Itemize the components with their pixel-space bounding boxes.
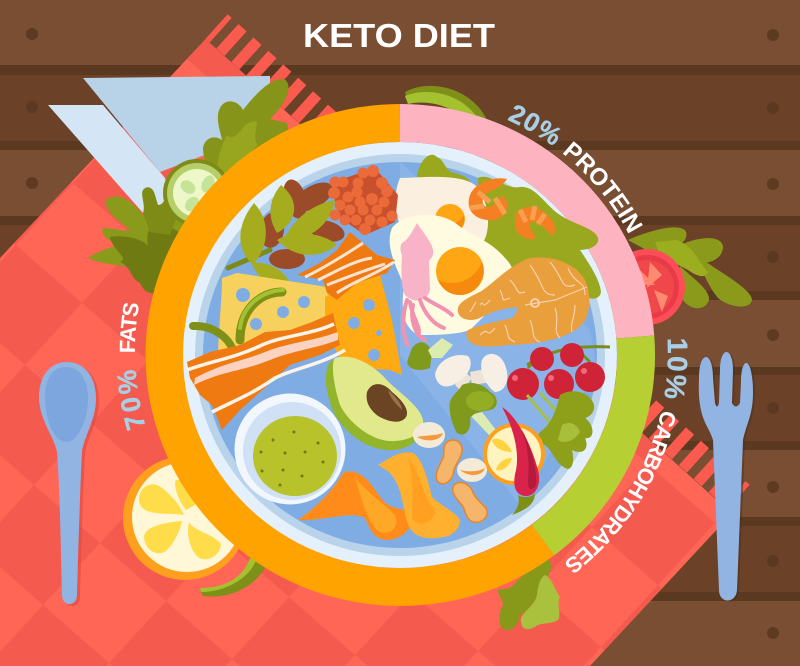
avocado half bbox=[326, 357, 423, 450]
label: 70% fats: FATS bbox=[120, 302, 138, 352]
olive green leaves and almonds bbox=[228, 176, 347, 285]
broccoli bbox=[449, 383, 497, 436]
label: 70% fats: 70% bbox=[117, 370, 145, 431]
icon: fork bbox=[699, 352, 755, 602]
yellow cheese bbox=[218, 273, 340, 360]
mushrooms bbox=[435, 354, 507, 392]
lemon slice beside plate bbox=[123, 456, 247, 580]
label: 20% protein: 20% bbox=[508, 105, 561, 145]
bowl of green sauce bbox=[234, 394, 346, 504]
plate bbox=[183, 142, 617, 568]
green pepper at top of plate bbox=[405, 86, 487, 124]
tomato and leaves at right of plate bbox=[609, 227, 752, 325]
fried egg front bbox=[390, 215, 514, 335]
label: 10% carbohydrates bbox=[566, 339, 688, 572]
label: 10% carbohydrates: 10% bbox=[664, 339, 688, 398]
shrimp 1 bbox=[469, 178, 507, 220]
chicken wing back bbox=[378, 452, 460, 538]
cucumber slice bbox=[163, 159, 231, 227]
orange cheese bbox=[325, 275, 402, 375]
shrimp 2 bbox=[515, 206, 555, 239]
squid bbox=[400, 223, 452, 345]
bacon large slice bbox=[187, 313, 345, 430]
red chili pepper bbox=[502, 407, 539, 515]
donut chart ring: 10% carbohydrates bbox=[543, 337, 636, 540]
green pepper under plate bbox=[200, 558, 266, 597]
bacon top slice bbox=[297, 232, 395, 300]
label: 10% carbohydrates: CARBOHYDRATES bbox=[566, 412, 675, 572]
left lettuce under napkin bbox=[88, 196, 195, 294]
label: 70% fats bbox=[117, 302, 145, 431]
small broccoli bbox=[407, 338, 453, 370]
lettuce under eggs bbox=[417, 155, 601, 299]
donut chart ring: 20% protein bbox=[400, 123, 635, 337]
parsley bbox=[527, 391, 594, 469]
salmon steak bbox=[458, 257, 589, 346]
icon: spoon bbox=[39, 362, 99, 606]
label: 20% protein bbox=[508, 105, 643, 234]
title: keto diet: KETO DIET bbox=[303, 17, 495, 54]
lemon slice on plate bbox=[483, 423, 545, 485]
green pepper strips bbox=[193, 290, 283, 355]
peanuts bbox=[436, 440, 487, 522]
label: 20% protein: PROTEIN bbox=[563, 141, 643, 234]
fried egg back bbox=[396, 177, 488, 246]
napkin bbox=[48, 76, 270, 213]
garnish: top-left lettuce leaves bbox=[142, 79, 289, 235]
salmon roe caviar bbox=[328, 165, 398, 235]
cherry tomatoes on vine bbox=[507, 343, 610, 400]
lettuce under plate bbox=[497, 555, 560, 630]
pistachios bbox=[413, 422, 487, 482]
chicken wing front bbox=[298, 471, 413, 540]
donut chart ring: 70% fats bbox=[165, 123, 543, 587]
